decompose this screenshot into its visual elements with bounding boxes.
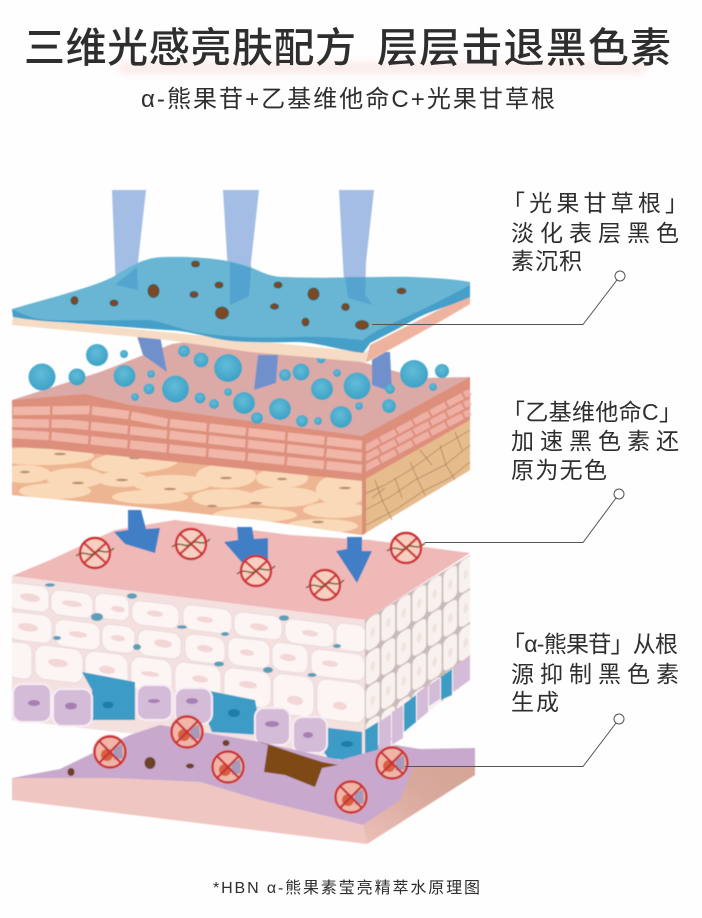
callout: licorice root (372, 190, 688, 324)
blue down arrows (114, 510, 372, 583)
callout: licorice root: 素沉积 (511, 248, 582, 274)
callout: alpha arbutin: 源抑制黑色素 (511, 661, 679, 687)
subtitle: α-熊果苷+乙基维他命C+光果甘草根 (141, 86, 555, 113)
title: 三维光感亮肤配方 (24, 25, 356, 71)
fat cells (12, 447, 362, 535)
red prohibited melanin icons, lower (92, 714, 410, 814)
skin layer diagram (0, 190, 475, 844)
melanin blob (258, 741, 338, 787)
melanocyte dots (45, 583, 341, 677)
layer 4: base layer (12, 714, 475, 844)
front cells (8, 582, 366, 724)
light beams above the surface (112, 190, 374, 305)
beam overlaps (116, 262, 373, 305)
callout: ethyl vitamin C (425, 399, 682, 542)
small melanin spots (68, 740, 230, 776)
red prohibited melanin icons, upper (76, 529, 425, 600)
callout: alpha arbutin: 生成 (511, 689, 559, 715)
callout: alpha arbutin: 「α-熊果苷」从根 (502, 631, 678, 657)
callout: ethyl vitamin C: 原为无色 (511, 457, 607, 483)
brick rows (12, 410, 362, 469)
fat cell nuclei (20, 453, 351, 523)
title (24, 25, 671, 74)
callout: licorice root: 「光果甘草根」 (502, 190, 688, 216)
callout: ethyl vitamin C: 「乙基维他命C」 (502, 399, 682, 425)
layer 2: dermis block (0, 336, 470, 535)
layer 1: blue epidermis sheet (12, 257, 470, 362)
bubbles (28, 344, 449, 428)
layer 3: epidermal cell block (8, 520, 470, 762)
callout: alpha arbutin (405, 631, 679, 766)
side bricks (364, 392, 470, 469)
nuclei (18, 592, 347, 711)
basal cell row (13, 655, 470, 762)
side basal cells (365, 722, 378, 762)
footnote: *HBN α-熊果素莹亮精萃水原理图 (213, 879, 480, 897)
title: 层层击退黑色素 (377, 25, 671, 71)
melanin spots (71, 261, 406, 330)
tan side (362, 420, 470, 535)
callout: ethyl vitamin C: 加速黑色素还 (511, 428, 679, 454)
beams passing through dermis (137, 336, 392, 392)
callout: licorice root: 淡化表层黑色 (511, 220, 679, 246)
